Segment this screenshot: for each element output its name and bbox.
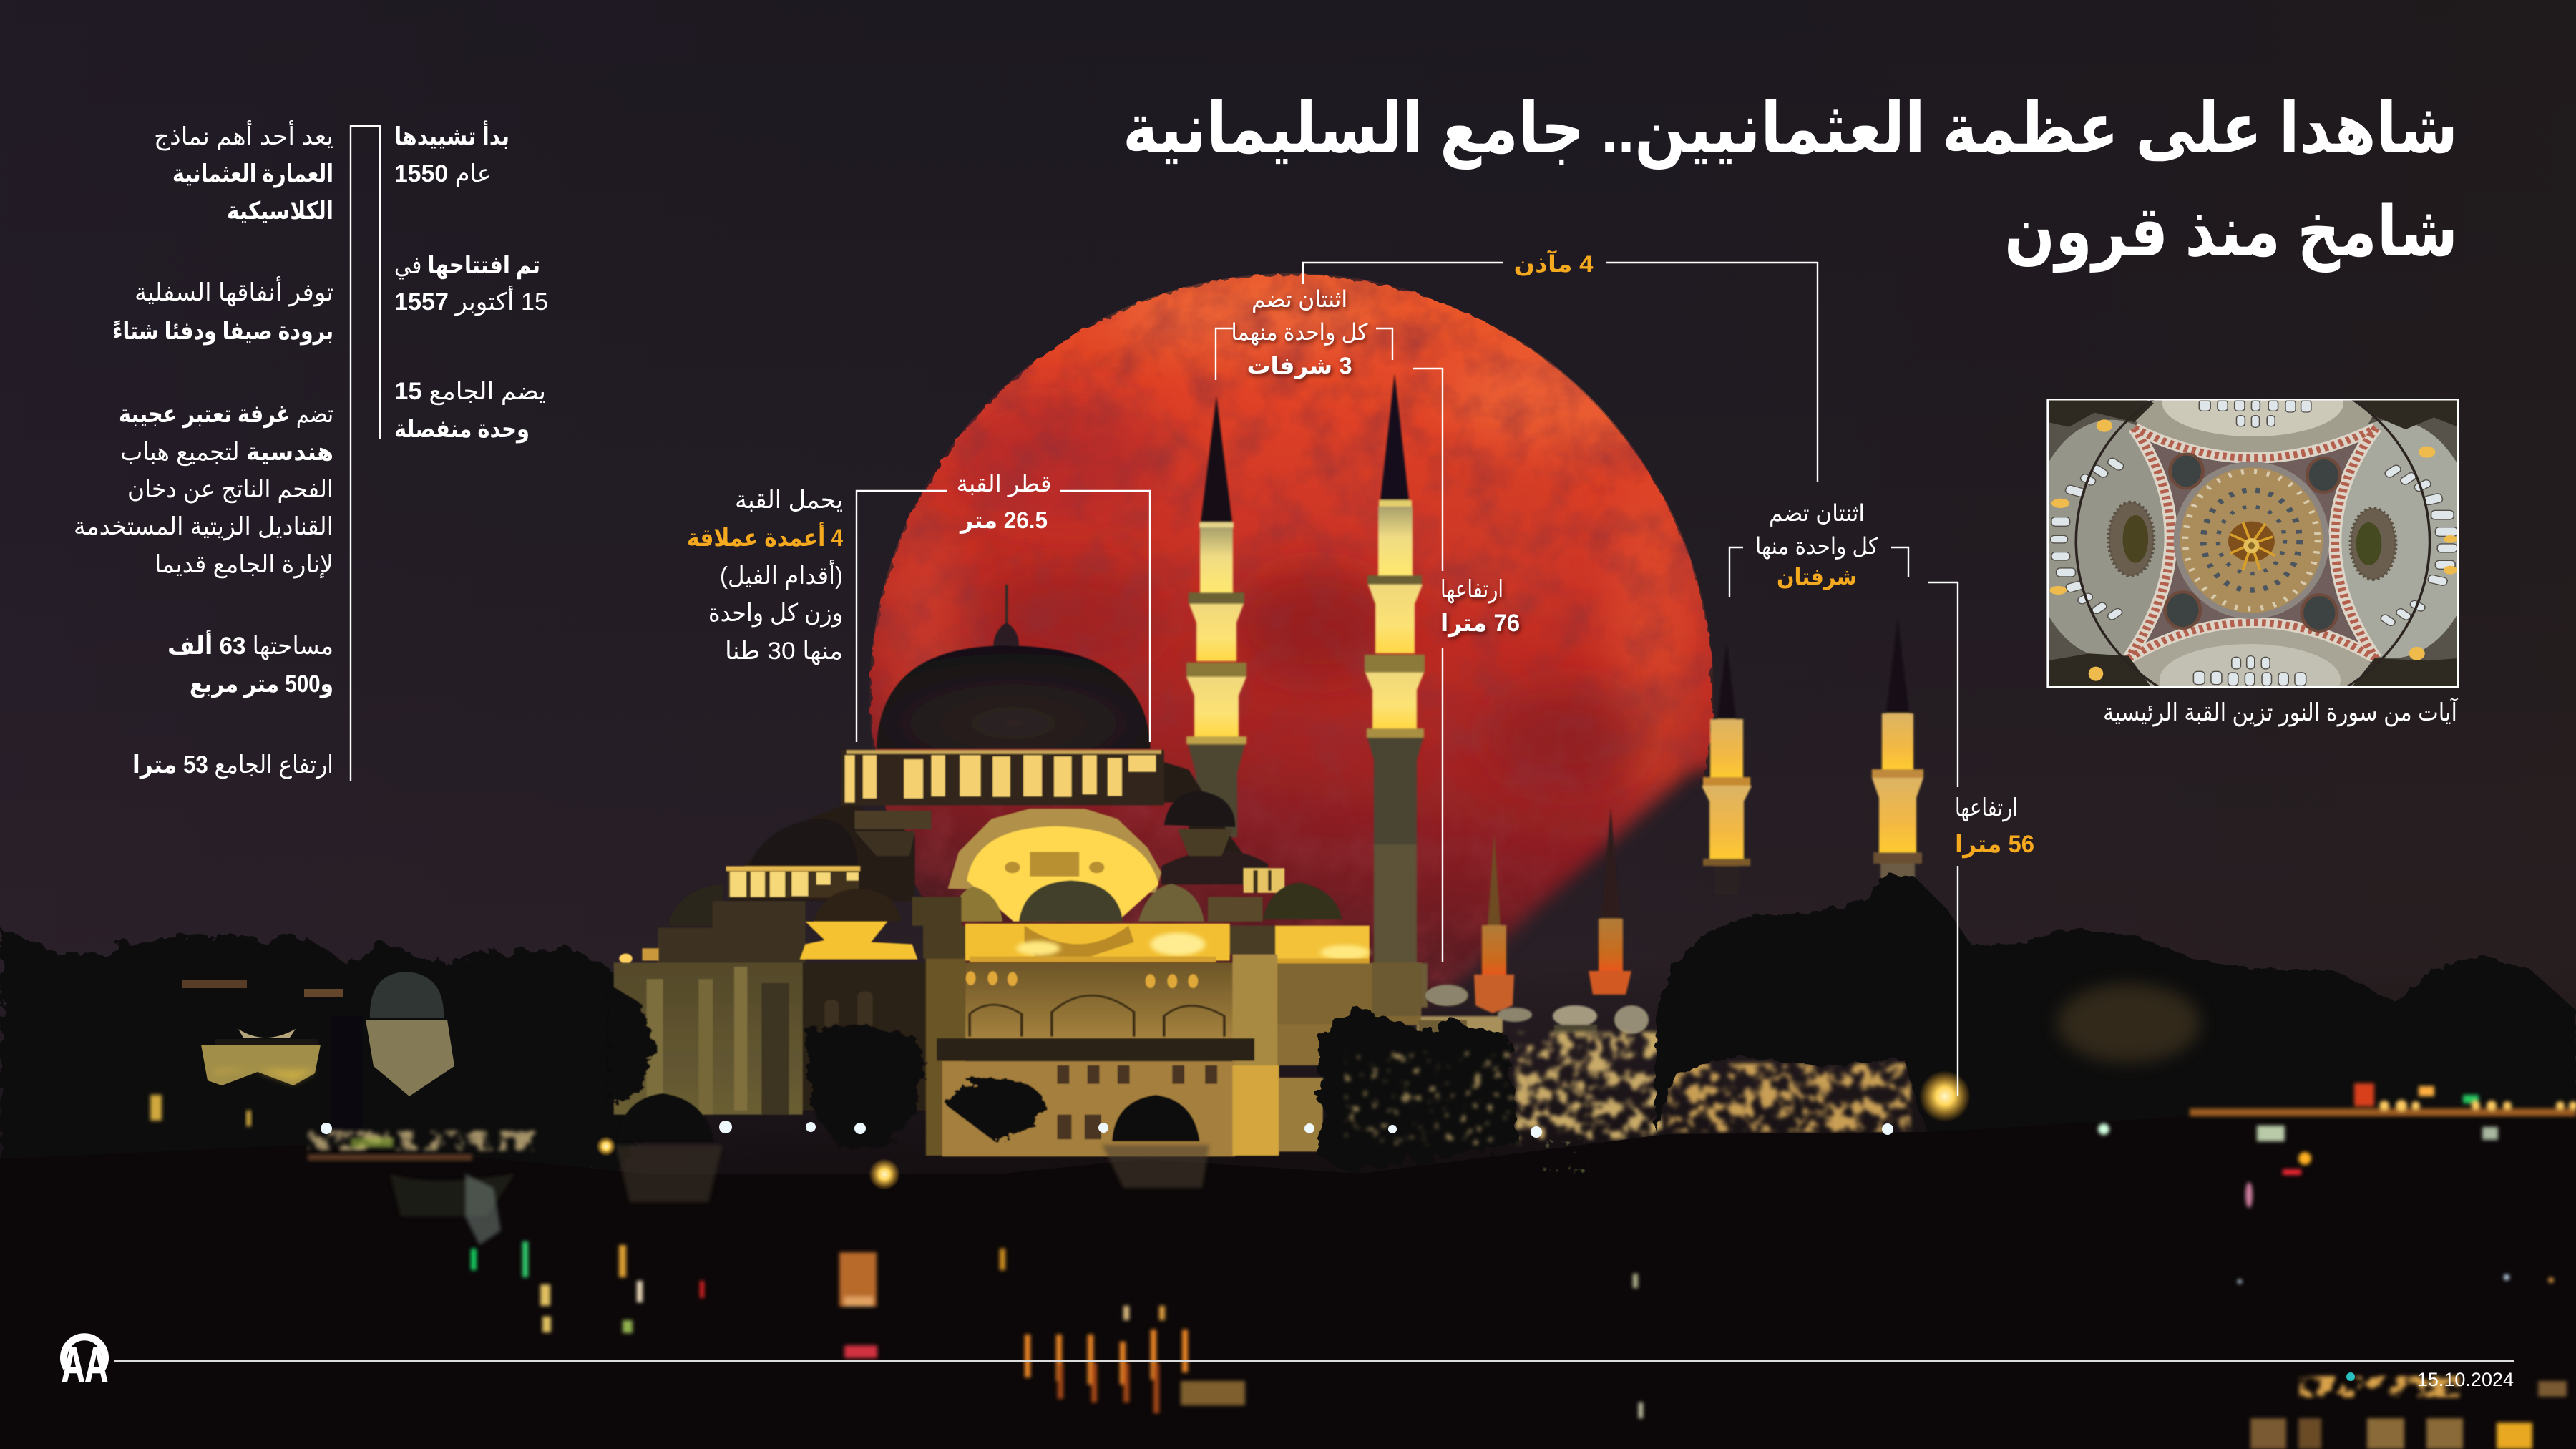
corner dark masonry — [2048, 399, 2458, 687]
fact: soot room: هندسية لتجميع هباب — [120, 439, 333, 466]
footer rule — [114, 1360, 2514, 1362]
fact: soot room: الفحم الناتج عن دخان — [127, 476, 333, 504]
callout: elephant feet columns: 4 أعمدة عملاقة — [687, 522, 843, 552]
callout: height 76 metres: 76 مترا — [1440, 610, 1520, 638]
lower facade walls — [614, 955, 1467, 1156]
photo border — [2048, 399, 2458, 687]
fact: classical architecture: يعد أحد أهم نماذج — [154, 120, 333, 151]
fact: units: وحدة منفصلة — [394, 416, 530, 444]
colonnade band and lower arcade — [937, 1038, 1370, 1156]
fact: tunnels — [112, 276, 333, 346]
upper wall band — [658, 897, 1277, 962]
bottom right lights row — [2299, 1372, 2460, 1397]
small minaret D — [1589, 808, 1631, 995]
minaret 3 — [1702, 644, 1752, 894]
hanging lamp ring — [2076, 370, 2430, 713]
moon — [869, 273, 1714, 1008]
fact: construction: عام 1550 — [394, 160, 492, 187]
half domes — [2049, 401, 2457, 686]
minaret 4 — [1872, 619, 1923, 991]
callout: dome diameter: قطر القبة — [956, 471, 1052, 497]
panel: left column facts — [74, 120, 333, 779]
fact: area — [167, 630, 333, 698]
lamps near mosque — [321, 1070, 1971, 1190]
central arch with stepped border — [947, 809, 1161, 922]
interior base — [2049, 412, 2457, 663]
inset photo: main dome interior — [2046, 399, 2459, 688]
drum with windows — [841, 750, 1164, 805]
callout: two minarets with two balconies: شرفتان — [1777, 564, 1857, 590]
callout: two minarets with three balconies: 3 شرفات — [1246, 353, 1352, 379]
near trees in front of wing — [1320, 1009, 1517, 1174]
callout: four minarets — [1303, 250, 1818, 482]
fact: construction — [394, 120, 509, 187]
main dome — [877, 585, 1151, 749]
side window rows — [726, 866, 1284, 898]
callout: height 56 metres: ارتفاعها — [1955, 794, 2018, 821]
small minaret C — [1474, 833, 1514, 1013]
callout: dome diameter: 26.5 متر — [959, 507, 1048, 534]
fact: area: و500 متر مربع — [190, 670, 333, 698]
date: 15.10.2024 — [2417, 1369, 2514, 1390]
wing walls and small domes — [1417, 985, 1649, 1035]
panel: right column facts — [394, 120, 548, 444]
callout: two minarets with three balconies — [1216, 286, 1392, 380]
callout: height 76 metres: ارتفاعها — [1440, 576, 1503, 603]
right side trees — [1320, 873, 2576, 1174]
fact: construction: بدأ تشييدها — [394, 120, 509, 150]
fact: opening — [394, 252, 548, 316]
side half domes — [668, 791, 1268, 926]
left minaret — [1186, 396, 1246, 837]
callout: height 56 metres: 56 مترا — [1955, 831, 2034, 859]
callout: two minarets with three balconies: اثنتان تضم — [1252, 286, 1347, 312]
callout: height 56 metres — [1928, 582, 2034, 1096]
chevron arches — [2128, 428, 2376, 658]
icon: AA logo — [62, 1337, 108, 1392]
front trees and small domes — [608, 983, 1200, 1148]
lower small domes — [814, 880, 1342, 922]
fact: soot room: لإنارة الجامع قديما — [155, 551, 333, 579]
callout: two minarets with three balconies: كل واحدة منهما — [1231, 319, 1368, 346]
title — [1123, 89, 2458, 273]
title: شامخ منذ قرون — [2004, 192, 2458, 273]
fact: tunnels: برودة صيفا ودفئا شتاءً — [112, 318, 333, 346]
callout: elephant feet columns: (أقدام الفيل) — [720, 560, 843, 590]
strip of buildings lit left — [308, 1131, 537, 1245]
callout: elephant feet columns: وزن كل واحدة — [708, 600, 843, 628]
callout: elephant feet columns: منها 30 طنا — [725, 638, 843, 665]
lamps — [2050, 419, 2457, 681]
callout: two minarets with two balconies: كل واحدة منها — [1755, 533, 1879, 560]
mid body dark — [728, 761, 1265, 901]
fact: soot room: القناديل الزيتية المستخدمة — [74, 513, 333, 541]
right tall minaret — [1360, 374, 1428, 1008]
fact: units: يضم الجامع 15 — [394, 378, 546, 405]
fact: soot room: تضم غرفة تعتبر عجيبة — [119, 401, 333, 429]
windows — [2051, 400, 2457, 686]
corner medallions — [2165, 454, 2340, 631]
fact: units — [394, 378, 546, 444]
callout: dome diameter — [857, 471, 1150, 742]
timeline bracket — [351, 126, 380, 781]
side medallions — [2109, 502, 2396, 580]
fact: opening: 15 أكتوبر 1557 — [394, 286, 548, 316]
central dome — [2174, 462, 2329, 619]
city lights — [471, 1083, 2576, 1449]
fact: classical architecture: العمارة العثمانية — [172, 160, 333, 187]
fact: classical architecture: الكلاسيكية — [227, 197, 333, 225]
fact: soot room — [74, 401, 333, 579]
callout: two minarets with two balconies — [1729, 500, 1908, 597]
bright illuminated panels — [619, 922, 1370, 963]
fact: area: مساحتها 63 ألف — [167, 630, 333, 660]
callout: height 76 metres — [1413, 369, 1520, 962]
distant domed building left — [150, 972, 454, 1126]
fact: opening: تم افتتاحها في — [394, 252, 540, 280]
callout: two minarets with two balconies: اثنتان تضم — [1769, 500, 1865, 526]
right and small minarets with side wing — [1417, 619, 1923, 1035]
callout: elephant feet columns — [687, 487, 843, 665]
callout: elephant feet columns: يحمل القبة — [735, 487, 843, 514]
foreground city — [0, 1070, 2576, 1449]
lit wall behind foliage — [1516, 1032, 1911, 1139]
callout: four minarets: 4 مآذن — [1514, 250, 1594, 277]
foreground lit domes — [390, 1145, 1209, 1216]
pendentives — [2146, 441, 2359, 643]
left trees, distant trees — [0, 928, 658, 1174]
fact: classical architecture — [154, 120, 333, 225]
fact: height: ارتفاع الجامع 53 مترا — [132, 751, 333, 779]
icon: AA logo: AA — [62, 1337, 108, 1392]
main mosque — [608, 585, 1467, 1156]
photo caption: آيات من سورة النور تزين القبة الرئيسية — [2103, 698, 2458, 727]
fact: tunnels: توفر أنفاقها السفلية — [135, 276, 333, 307]
